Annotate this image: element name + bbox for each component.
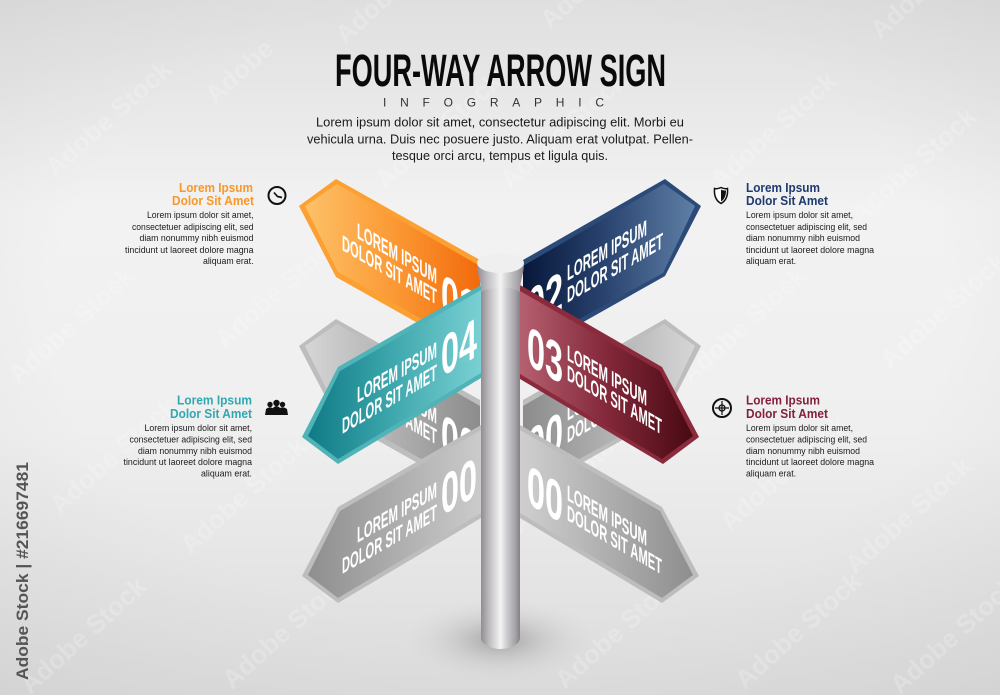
text block 01 orange: Dolor Sit Amet <box>172 194 255 208</box>
watermark pattern: Adobe <box>199 33 279 109</box>
text block 02 navy: Lorem ipsum dolor sit amet, <box>746 210 853 220</box>
text block 02 navy: Dolor Sit Amet <box>746 194 829 208</box>
signpost <box>477 253 524 649</box>
sign: gray front right: DOLOR SIT AMET <box>567 501 662 581</box>
sign: gray back left <box>299 319 480 498</box>
sign: gray front right: LOREM IPSUM <box>567 481 647 552</box>
sign: gray back left: DOLOR SIT AMET <box>342 371 437 451</box>
sign 01: orange arrow: 01 <box>441 261 477 345</box>
watermark pattern: Adobe Stock <box>549 565 688 694</box>
icon: people <box>265 400 288 415</box>
post ground shadow <box>405 598 595 682</box>
subtitle: INFOGRAPHIC <box>383 96 604 110</box>
watermark pattern: Adobe Stock <box>494 65 633 194</box>
sign 03: red arrow: DOLOR SIT AMET <box>567 361 662 441</box>
watermark pattern: Adobe Stock <box>216 565 355 694</box>
sign: gray front left: LOREM IPSUM <box>357 477 437 549</box>
watermark pattern: Adobe Stock <box>729 565 868 694</box>
sign 02: navy arrow: LOREM IPSUM <box>567 215 647 287</box>
text block 04 teal: tincidunt ut laoreet dolore magna <box>124 457 252 467</box>
text block 03 red: aliquam erat. <box>746 468 796 478</box>
text block 04 teal: consectetuer adipiscing elit, sed <box>130 434 252 444</box>
text block 04 teal: Dolor Sit Amet <box>170 407 253 421</box>
text block 01 orange <box>125 181 255 266</box>
text block 01 orange: consectetuer adipiscing elit, sed <box>132 222 254 232</box>
watermark pattern: Adobe Stock <box>714 407 853 536</box>
sign 04: teal arrow: LOREM IPSUM <box>357 337 437 409</box>
sign 04: teal arrow: 04 <box>441 305 477 389</box>
sign: gray front left: 00 <box>441 444 477 528</box>
icon: clock <box>268 187 286 204</box>
sign: gray back right: DOLOR SIT AMET <box>567 368 663 449</box>
sign 02: navy arrow: DOLOR SIT AMET <box>567 228 663 309</box>
watermark pattern: Adobe Stock <box>369 65 508 194</box>
text block 02 navy: aliquam erat. <box>746 256 796 266</box>
text block 01 orange: Lorem Ipsum <box>179 181 253 195</box>
text block 03 red: Lorem ipsum dolor sit amet, <box>746 423 853 433</box>
sign 02: navy arrow <box>523 179 701 356</box>
sign 03: red arrow <box>520 285 699 464</box>
text block 01 orange: Lorem ipsum dolor sit amet, <box>147 210 254 220</box>
sign 01: orange arrow: LOREM IPSUM <box>357 219 437 290</box>
sign: gray back right: 00 <box>527 398 563 482</box>
text block 02 navy <box>746 181 874 266</box>
text block 03 red: Dolor Sit Amet <box>746 407 829 421</box>
intro paragraph: vehicula urna. Duis nec posuere justo. Aliquam erat volutpat. Pellen- <box>307 132 693 146</box>
post shaft <box>481 275 520 649</box>
icon: shield <box>714 188 728 204</box>
watermark pattern: Adobe Stock <box>44 390 183 519</box>
text block 01 orange: aliquam erat. <box>203 256 254 266</box>
sign: gray front left <box>302 425 481 603</box>
sign: gray front left: DOLOR SIT AMET <box>342 500 437 580</box>
text block 03 red: Lorem Ipsum <box>746 394 820 408</box>
sign 03: red arrow: 03 <box>527 313 563 397</box>
post cap <box>477 253 524 292</box>
sign: gray back left: LOREM IPSUM <box>357 359 437 430</box>
watermark pattern: Adobe Stock <box>674 260 813 389</box>
sign 03: red arrow: LOREM IPSUM <box>567 341 647 412</box>
sign: gray front right <box>520 425 699 603</box>
sign 01: orange arrow <box>299 179 480 358</box>
watermark pattern: Adobe Stock <box>844 100 983 229</box>
watermark pattern: Adobe Stock <box>209 225 348 354</box>
text block 04 teal: diam nonummy nibh euismod <box>138 446 252 456</box>
icon: compass <box>713 399 731 417</box>
text block 03 red: consectetuer adipiscing elit, sed <box>746 434 867 444</box>
sign: gray front right: 00 <box>527 452 563 536</box>
title: FOUR-WAY ARROW SIGN <box>335 45 666 96</box>
text block 04 teal: Lorem Ipsum <box>177 394 252 408</box>
intro paragraph: tesque orci arcu, tempus et ligula quis. <box>392 149 608 163</box>
sign: gray back right <box>523 319 701 496</box>
watermark pattern: Adobe Stock <box>504 410 643 539</box>
side stock label: Adobe Stock | #216697481 <box>13 462 32 680</box>
watermark pattern: Adobe Stock <box>839 450 978 579</box>
watermark pattern: Adobe Stock <box>39 53 178 182</box>
text block 01 orange: diam nonummy nibh euismod <box>140 233 254 243</box>
sign: gray back right: LOREM IPSUM <box>567 355 647 427</box>
watermark pattern: Adobe Stock <box>2 260 141 389</box>
text block 02 navy: Lorem Ipsum <box>746 181 820 195</box>
sign 04: teal arrow <box>302 285 481 464</box>
text block 02 navy: tincidunt ut laoreet dolore magna <box>746 245 874 255</box>
sign 02: navy arrow: 02 <box>527 258 563 342</box>
text block 03 red: diam nonummy nibh euismod <box>746 446 860 456</box>
text block 01 orange: tincidunt ut laoreet dolore magna <box>125 245 254 255</box>
watermark pattern: Adobe Stock <box>704 65 843 194</box>
text block 04 teal: aliquam erat. <box>201 468 252 478</box>
watermark pattern: Adobe Stock <box>174 430 313 559</box>
text block 02 navy: consectetuer adipiscing elit, sed <box>746 222 867 232</box>
sign 04: teal arrow: DOLOR SIT AMET <box>342 360 437 440</box>
text block 04 teal: Lorem ipsum dolor sit amet, <box>144 423 252 433</box>
text block 03 red <box>746 394 874 478</box>
text block 02 navy: diam nonummy nibh euismod <box>746 233 860 243</box>
text block 03 red: tincidunt ut laoreet dolore magna <box>746 457 874 467</box>
intro paragraph <box>307 116 693 163</box>
text block 04 teal <box>124 394 253 478</box>
intro paragraph: Lorem ipsum dolor sit amet, consectetur adipiscing elit. Morbi eu <box>316 116 684 130</box>
sign 01: orange arrow: DOLOR SIT AMET <box>342 231 437 311</box>
sign: gray back left: 00 <box>441 401 477 485</box>
